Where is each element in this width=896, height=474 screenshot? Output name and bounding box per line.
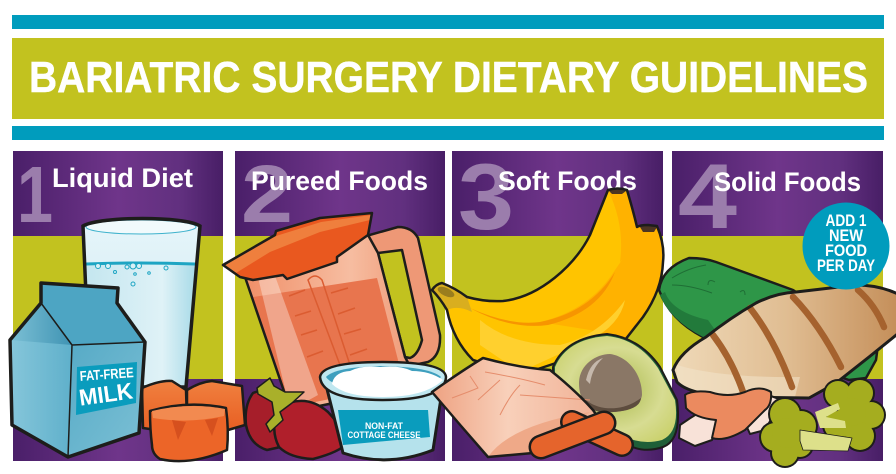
icon: milk carton — [10, 283, 145, 457]
label: fat-free milk: FAT-FREE — [79, 364, 134, 384]
number 1: 1 — [17, 150, 53, 239]
panel: step 1 background — [13, 150, 223, 461]
panel: step 4 background — [672, 146, 883, 461]
icon: avocado — [553, 334, 678, 450]
title banner — [12, 38, 884, 119]
number 2: 2 — [241, 149, 293, 240]
heading: Pureed Foods: Pureed Foods — [251, 166, 428, 196]
callout: add 1 new food per day: ADD 1 — [826, 211, 866, 230]
icon: strawberries — [246, 378, 347, 459]
heading: Solid Foods: Solid Foods — [714, 167, 861, 197]
callout: add 1 new food per day: NEW — [829, 226, 864, 245]
number 4: 4 — [678, 146, 737, 248]
label: non-fat cottage cheese: COTTAGE CHEESE — [348, 430, 420, 441]
icon: broccoli — [759, 378, 886, 468]
number 3: 3 — [458, 144, 514, 249]
callout: add 1 new food per day: FOOD — [825, 241, 867, 260]
icon: blender pitcher — [223, 213, 440, 410]
icon: grilled chicken breast — [673, 285, 896, 398]
icon: bananas — [432, 188, 663, 375]
left floret — [759, 397, 852, 468]
callout: add 1 new food per day: PER DAY — [817, 256, 876, 275]
panel: step 2 background — [235, 149, 445, 461]
icon: orange ice cubes — [142, 381, 245, 461]
label: non-fat cottage cheese: NON-FAT — [365, 421, 403, 432]
icon: salmon fillet — [432, 358, 600, 457]
panel: step 3 background — [452, 144, 663, 461]
bottom teal bar — [12, 126, 884, 140]
label: non-fat cottage cheese — [338, 410, 430, 445]
label: fat-free milk: MILK — [77, 377, 135, 411]
icon: cucumber — [659, 258, 878, 380]
label: fat-free milk — [76, 362, 137, 415]
callout: add 1 new food per day — [802, 202, 890, 290]
icon: shrimp and mushrooms — [679, 388, 782, 446]
icon: baby carrots — [541, 422, 622, 447]
icon: glass of water — [83, 218, 200, 387]
heading: Liquid Diet: Liquid Diet — [52, 163, 193, 193]
icon: cottage cheese tub — [320, 362, 446, 460]
top teal bar — [12, 15, 884, 29]
right floret — [815, 378, 886, 452]
heading: Soft Foods: Soft Foods — [498, 166, 637, 196]
